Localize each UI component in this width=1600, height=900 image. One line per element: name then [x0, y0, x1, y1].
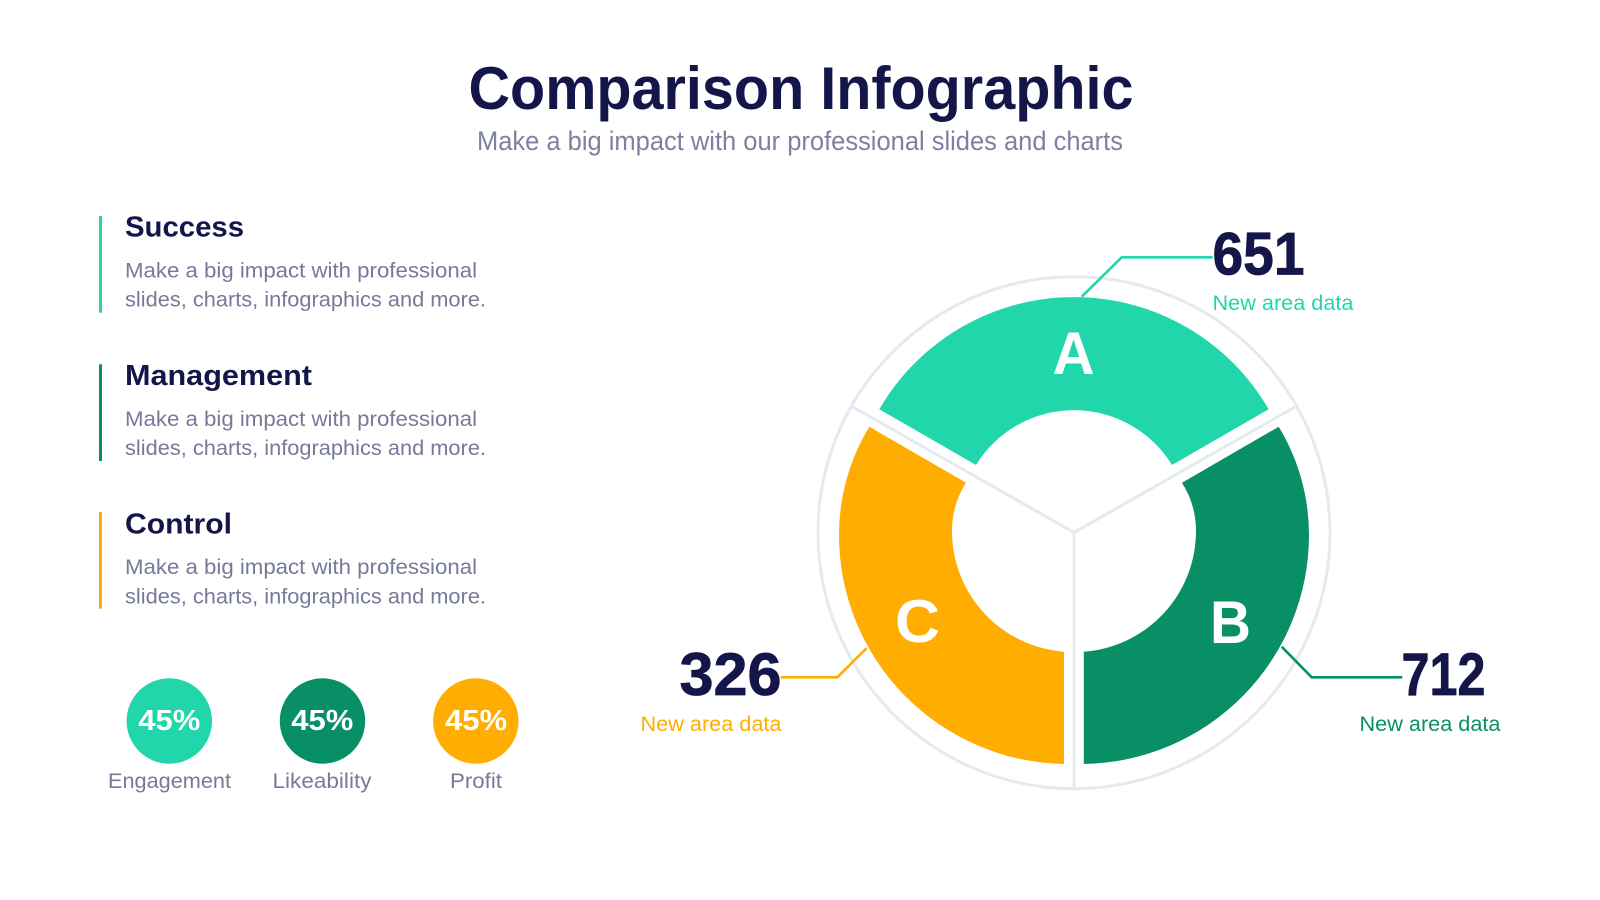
panel: success [99, 212, 486, 313]
stat: profit [433, 678, 518, 793]
panel: control: slides, charts, infographics and more. [125, 584, 486, 608]
segment C [839, 427, 1064, 764]
callout: C 326 [640, 641, 867, 736]
panel: control [99, 508, 486, 609]
stat: likeability [272, 678, 372, 793]
stat: profit: Profit [450, 769, 502, 793]
stat: likeability: 45% [291, 705, 354, 737]
segment B: B [1210, 589, 1251, 656]
segment A: A [1052, 320, 1094, 387]
stat: engagement [108, 678, 231, 793]
donut chart [818, 277, 1330, 789]
stat: likeability: Likeability [272, 769, 372, 793]
segment C: C [895, 588, 940, 655]
callout: C 326: New area data [640, 712, 782, 736]
stat: engagement: Engagement [108, 769, 231, 793]
callout: A 651 [1082, 220, 1354, 315]
subtitle: Make a big impact with our professional slides and charts [477, 126, 1123, 156]
panel: control: Control [125, 508, 232, 540]
title: Comparison Infographic [468, 55, 1134, 122]
panel: management [99, 360, 486, 461]
panel: success: Make a big impact with professional [125, 259, 477, 283]
outer ring with spokes [818, 277, 1330, 789]
panel: control: Make a big impact with professional [125, 555, 477, 579]
stat: engagement: 45% [138, 705, 201, 737]
callout: B 712: 712 [1402, 641, 1486, 708]
stat: profit: 45% [445, 705, 507, 737]
panel: management: slides, charts, infographics and more. [125, 436, 486, 460]
callout: A 651: 651 [1212, 220, 1304, 288]
panel: management: Make a big impact with professional [125, 407, 477, 431]
panel: success: slides, charts, infographics and more. [125, 288, 486, 312]
callout: B 712 [1282, 641, 1501, 736]
segment A [879, 297, 1269, 465]
panel: management: Management [125, 360, 313, 392]
callout: C 326: 326 [680, 641, 782, 708]
callout: A 651: New area data [1212, 291, 1354, 315]
panel: success: Success [125, 212, 244, 244]
callout: B 712: New area data [1360, 712, 1501, 736]
segment B [1084, 427, 1309, 764]
